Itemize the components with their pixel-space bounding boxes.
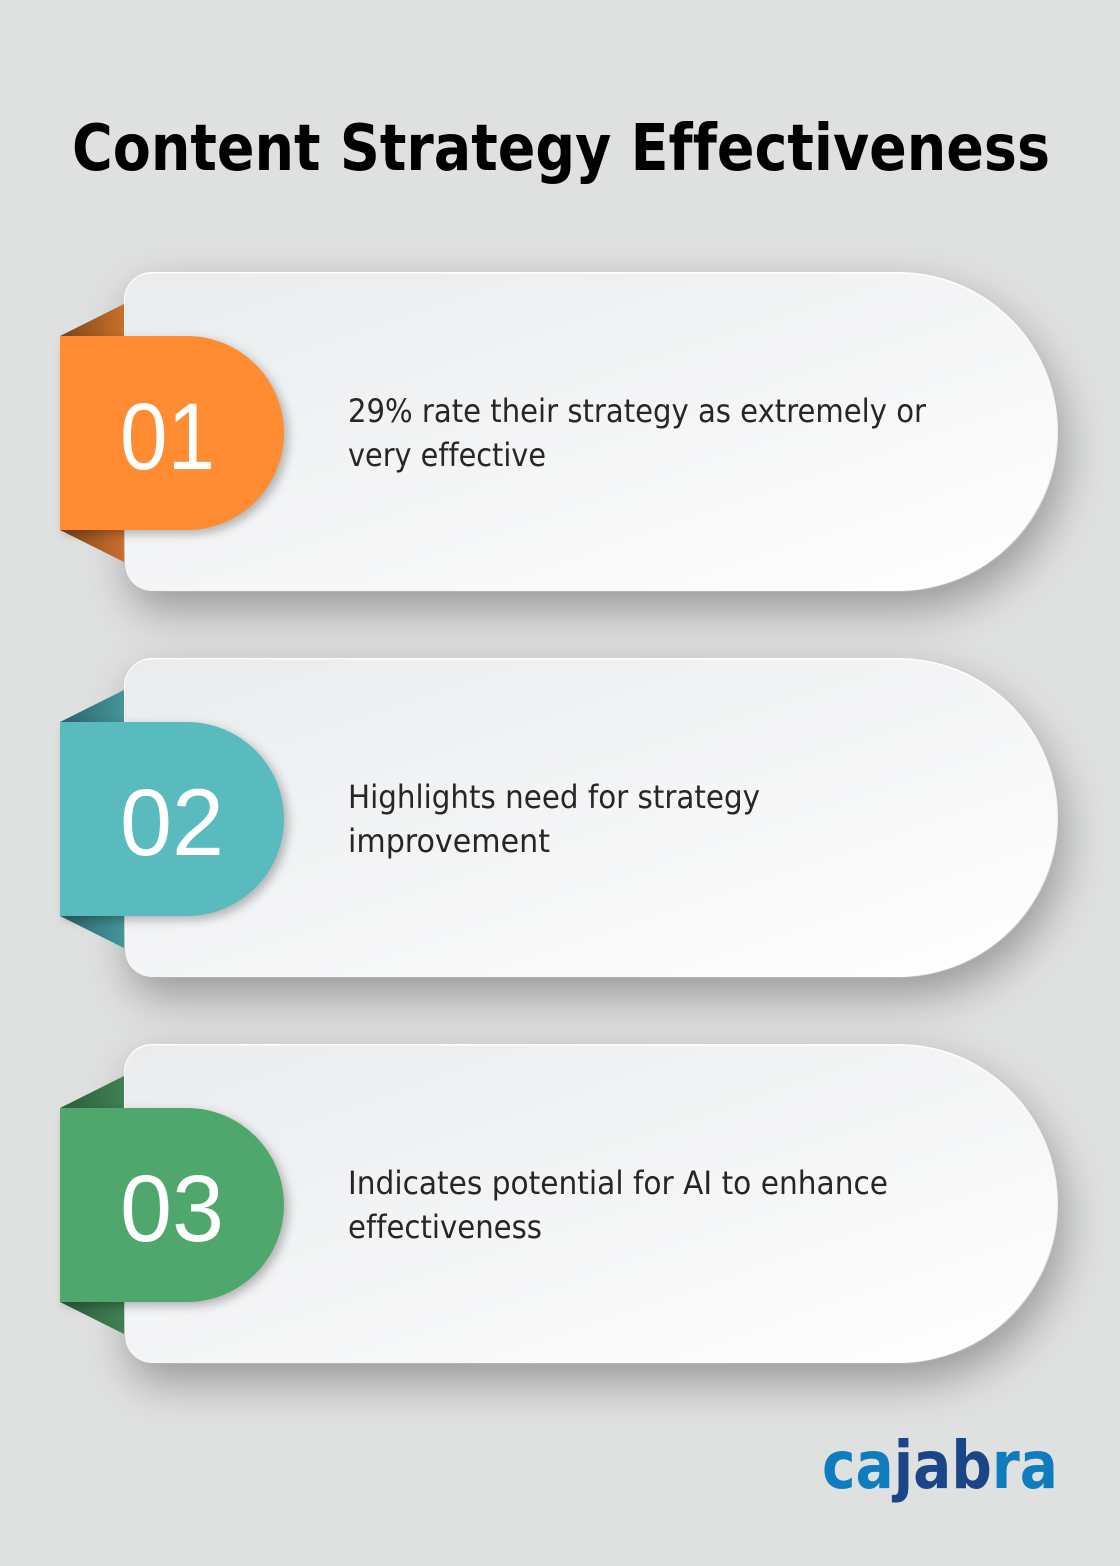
ribbon fold bottom 03 [60,1302,124,1334]
ribbon fold top 02 [60,690,124,722]
number tab 03 [60,1108,284,1302]
ribbon fold top 01 [60,304,124,336]
panel: item 02 [60,658,1064,996]
ribbon fold bottom 02 [60,916,124,948]
card edge 02 [124,658,1058,978]
description 03: Indicates potential for AI to enhance [348,1164,888,1202]
description 03: effectiveness [348,1208,542,1246]
card body 03 [125,1045,1057,1363]
ribbon fold top 03 [60,1076,124,1108]
card body 01 [125,273,1057,591]
description 02: Highlights need for strategy [348,778,760,816]
description 01: 29% rate their strategy as extremely or [348,392,927,430]
card shadow 03 [130,1062,1064,1382]
card shadow 01 [130,290,1064,610]
panel: item 01 [60,272,1064,610]
card edge 03 [124,1044,1058,1364]
tab shadow 03 [64,1112,288,1306]
card shadow 02 [130,676,1064,996]
description 02: improvement [348,822,550,860]
description 01: very effective [348,436,546,474]
card body 02 [125,659,1057,977]
tab shadow 01 [64,340,288,534]
logo: cajabra: cajabra [822,1427,1058,1504]
number 02: 02 [120,770,224,876]
number 01: 01 [120,384,215,490]
card edge 01 [124,272,1058,592]
ribbon fold bottom 01 [60,530,124,562]
panel: item 03 [60,1044,1064,1382]
number 03: 03 [120,1156,224,1262]
number tab 01 [60,336,284,530]
number tab 02 [60,722,284,916]
tab shadow 02 [64,726,288,920]
